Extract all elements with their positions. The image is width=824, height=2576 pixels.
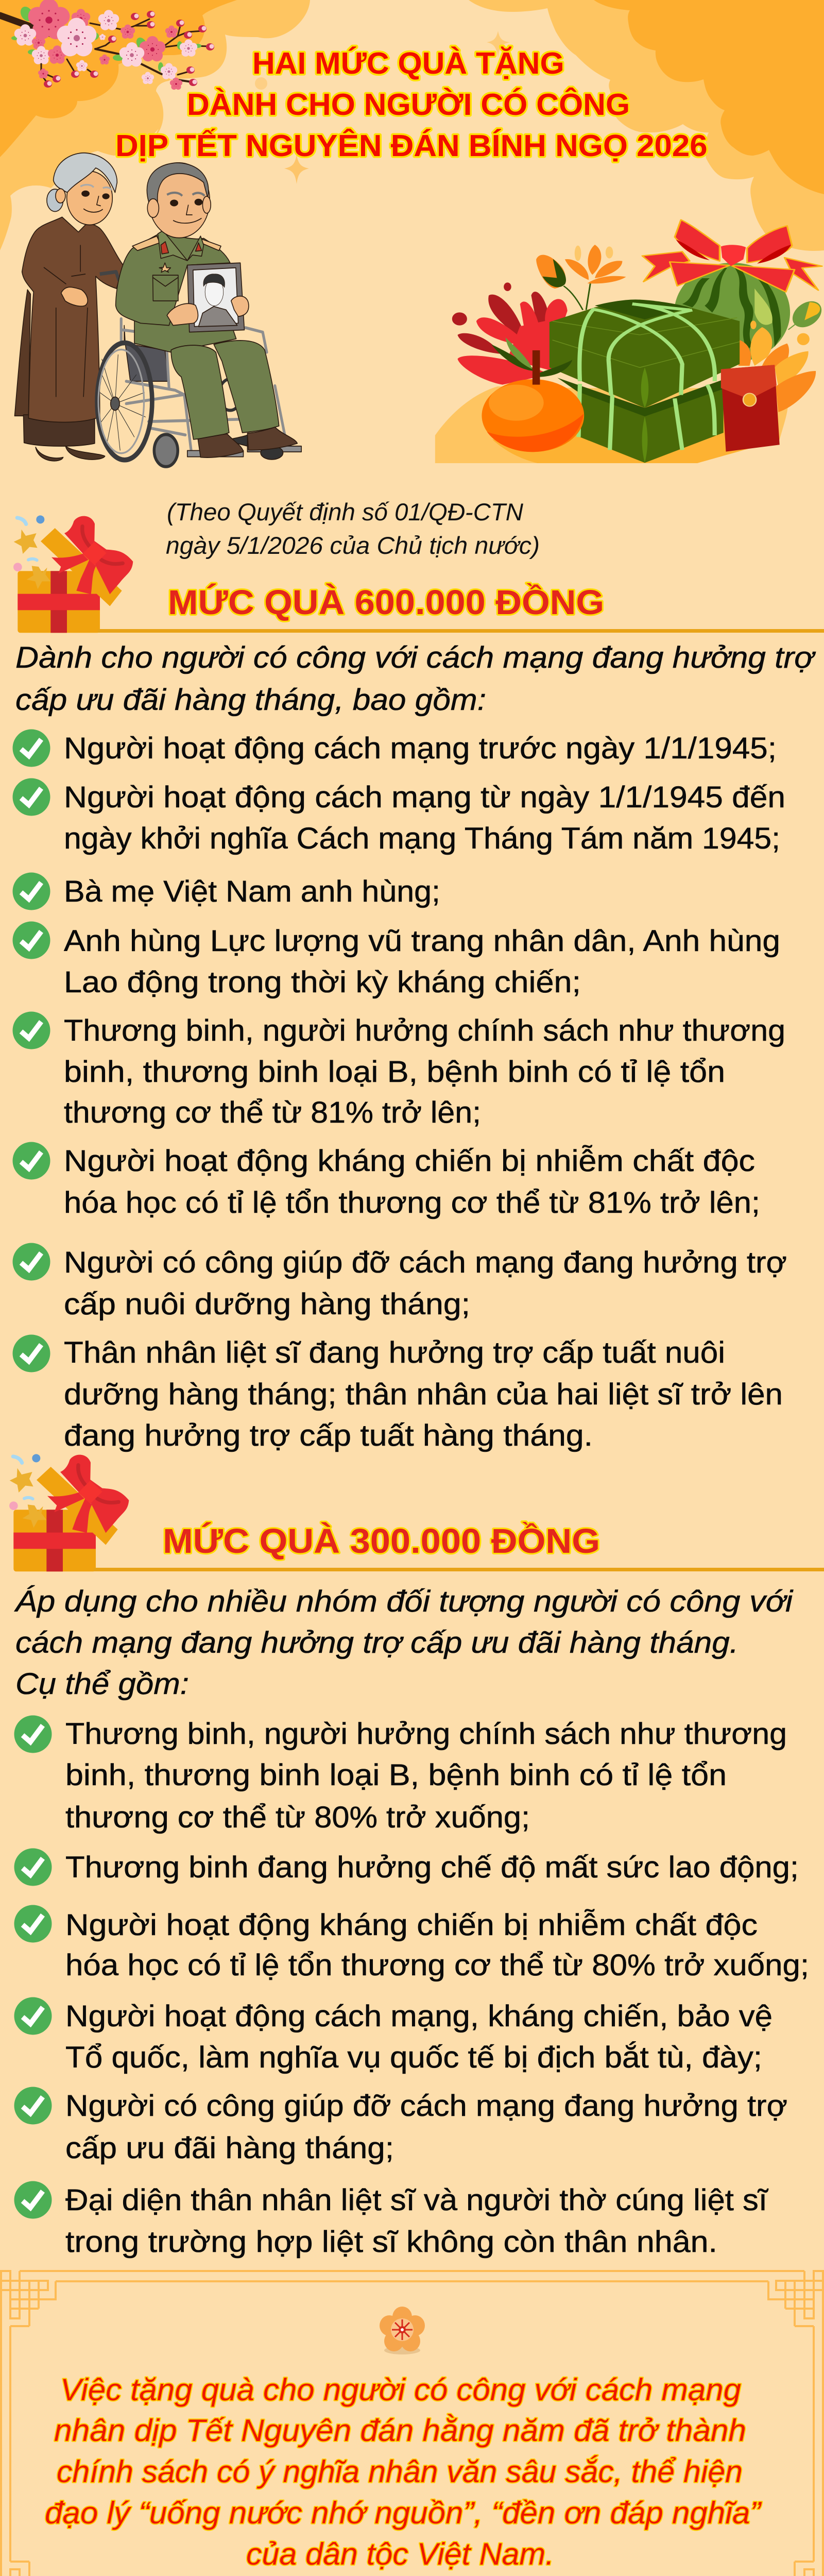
intro: 300.000: cách mạng đang hưởng trợ cấp ưu đãi hàng tháng. (15, 1626, 739, 1659)
item 1: Người hoạt động cách mạng trước ngày 1/1/1945; (64, 732, 777, 765)
ornamental frame (0, 2271, 824, 2576)
closing statement: của dân tộc Việt Nam. (246, 2537, 554, 2571)
intro: 600.000: Dành cho người có công với cách mạng đang hưởng trợ (15, 641, 816, 674)
item 2: Thương binh đang hưởng chế độ mất sức lao động; (65, 1851, 799, 1884)
red envelope (721, 365, 780, 452)
item 3: Người hoạt động kháng chiến bị nhiễm chất độc (65, 1908, 758, 1942)
closing statement (45, 2372, 762, 2571)
item 1: thương cơ thể từ 80% trở xuống; (65, 1801, 530, 1834)
list: 600.000 (12, 730, 787, 1452)
header clouds (0, 0, 824, 251)
item 4: Anh hùng Lực lượng vũ trang nhân dân, Anh hùng (64, 924, 780, 958)
item 8: Thân nhân liệt sĩ đang hưởng trợ cấp tuất nuôi (64, 1336, 725, 1369)
title: DỊP TẾT NGUYÊN ĐÁN BÍNH NGỌ 2026 (115, 128, 708, 163)
watermelon (674, 263, 790, 362)
item 2: Người hoạt động cách mạng từ ngày 1/1/1945 đến (64, 781, 785, 814)
item 3: hóa học có tỉ lệ tổn thương cơ thể từ 80% trở xuống; (65, 1948, 809, 1982)
red flower (452, 282, 568, 385)
item 8: đang hưởng trợ cấp tuất hàng tháng. (64, 1419, 593, 1452)
item 4: Tổ quốc, làm nghĩa vụ quốc tế bị địch bắt tù, đày; (65, 2041, 762, 2074)
veteran (116, 163, 297, 457)
illustration: elderly woman and veteran in wheelchair (14, 153, 301, 467)
item 6: Đại diện thân nhân liệt sĩ và người thờ cúng liệt sĩ (65, 2183, 769, 2217)
item 5: cấp ưu đãi hàng tháng; (65, 2131, 394, 2165)
blossom branch (0, 0, 214, 91)
list: 300.000 (14, 1716, 809, 2259)
closing statement: nhân dịp Tết Nguyên đán hằng năm đã trở thành (54, 2413, 746, 2448)
heading: 600.000: MỨC QUÀ 600.000 ĐỒNG (168, 583, 604, 622)
closing statement: Việc tặng quà cho người có công với cách mạng (60, 2372, 741, 2407)
title: DÀNH CHO NGƯỜI CÓ CÔNG (187, 88, 630, 122)
closing statement: chính sách có ý nghĩa nhân văn sâu sắc, thể hiện (57, 2454, 743, 2489)
photo frame (167, 263, 249, 332)
item 4 (14, 1997, 772, 2074)
item 6 (12, 1142, 760, 1219)
item 5: binh, thương binh loại B, bệnh binh có tỉ lệ tổn (64, 1055, 725, 1089)
intro: 300.000: Cụ thể gồm: (15, 1667, 189, 1701)
intro: 300.000 (14, 1585, 794, 1701)
ground (435, 386, 788, 463)
intro: 600.000 (15, 641, 816, 717)
item 8: dưỡng hàng tháng; thân nhân của hai liệt sĩ trở lên (64, 1378, 783, 1411)
item 6: Người hoạt động kháng chiến bị nhiễm chất độc (64, 1144, 755, 1178)
intro: 600.000: cấp ưu đãi hàng tháng, bao gồm: (15, 683, 486, 717)
item 5: thương cơ thể từ 81% trở lên; (64, 1096, 481, 1129)
item 6 (14, 2181, 769, 2259)
item 7 (12, 1243, 787, 1321)
item 5 (12, 1012, 785, 1129)
item 1: Thương binh, người hưởng chính sách như thương (65, 1717, 787, 1751)
item 7: Người có công giúp đỡ cách mạng đang hưởng trợ (64, 1246, 787, 1279)
item 7: cấp nuôi dưỡng hàng tháng; (64, 1287, 470, 1321)
illustration: banh chung, watermelon, orange and red envelope (435, 220, 824, 463)
wheelchair (97, 272, 301, 467)
item 2 (12, 778, 785, 855)
right orange petals (739, 298, 824, 412)
icon: gift box 600.000 (13, 515, 133, 633)
title: HAI MỨC QUÀ TẶNG (252, 46, 564, 80)
item 8 (12, 1334, 783, 1452)
icon: gift box 300.000 (9, 1454, 129, 1571)
item 4 (12, 921, 780, 999)
item 6: trong trường hợp liệt sĩ không còn thân nhân. (65, 2225, 717, 2259)
item 6: hóa học có tỉ lệ tổn thương cơ thể từ 81% trở lên; (64, 1186, 760, 1219)
closing statement: đạo lý “uống nước nhớ nguồn”, “đền ơn đáp nghĩa” (45, 2496, 762, 2530)
item 2: ngày khởi nghĩa Cách mạng Tháng Tám năm 1945; (64, 822, 780, 855)
item 3: Bà mẹ Việt Nam anh hùng; (64, 875, 440, 908)
item 1 (14, 1716, 787, 1834)
intro: 300.000: Áp dụng cho nhiều nhóm đối tượng người có công với (14, 1585, 794, 1618)
item 5: Thương binh, người hưởng chính sách như thương (64, 1014, 785, 1047)
heading: 300.000: MỨC QUÀ 300.000 ĐỒNG (163, 1522, 600, 1561)
decree note: (Theo Quyết định số 01/QĐ-CTN (167, 498, 523, 526)
orange fruit (482, 337, 584, 452)
orange flower and bud (536, 245, 626, 310)
bow (642, 220, 822, 292)
item 5: Người có công giúp đỡ cách mạng đang hưởng trợ (65, 2089, 787, 2123)
decree note (166, 498, 540, 559)
item 4: Lao động trong thời kỳ kháng chiến; (64, 965, 581, 999)
item 5 (14, 2087, 787, 2165)
item 1: binh, thương binh loại B, bệnh binh có tỉ lệ tổn (65, 1758, 727, 1792)
decree note: ngày 5/1/2026 của Chủ tịch nước) (166, 532, 540, 559)
elderly woman (14, 153, 123, 461)
item 3 (14, 1905, 809, 1982)
title (115, 46, 708, 163)
icon: plum flower (380, 2307, 425, 2354)
item 4: Người hoạt động cách mạng, kháng chiến, bảo vệ (65, 1999, 772, 2033)
banh chung cakes (550, 299, 740, 463)
